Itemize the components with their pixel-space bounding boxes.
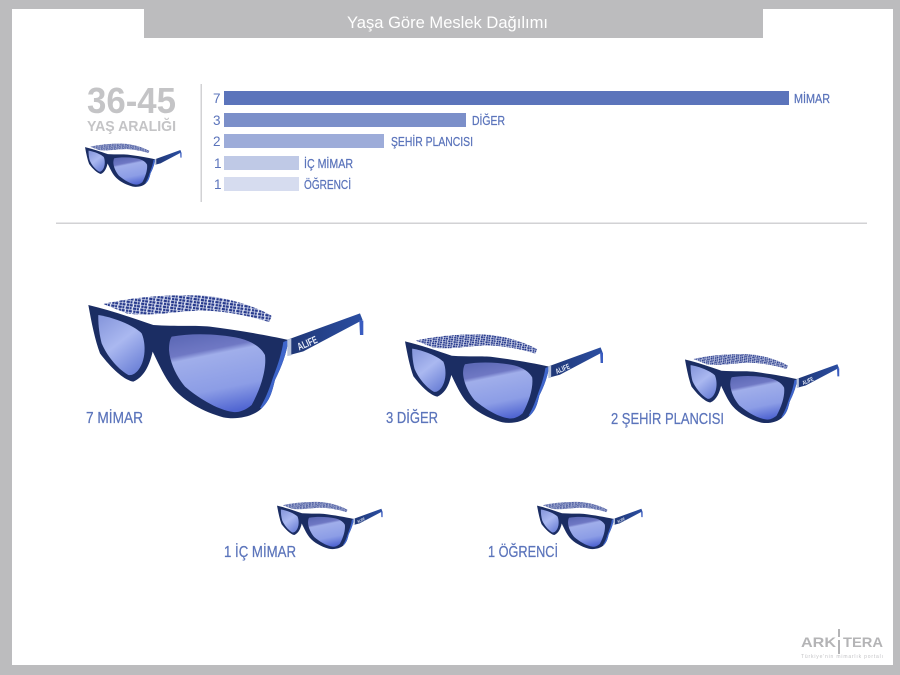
horizontal divider [56,222,867,224]
label: 1 iç mimar: 1 İÇ MİMAR [224,542,296,561]
age range heading: YAŞ ARALIĞI [87,117,176,135]
bar: öğrenci 1: ÖĞRENCİ [304,177,351,192]
icon: large sunglasses: ALIFE [296,334,319,353]
icon: sunglasses: ALIFE [616,516,626,524]
icon: sunglasses: ALIFE [554,362,571,376]
logo: Arkitera: ARK [801,634,836,650]
title bar [144,9,763,38]
bar: öğrenci 1 [214,177,351,192]
pictogram: 1 iç mimar [224,502,383,561]
bar chart: occupations [213,91,830,192]
logo: Arkitera: Türkiye'nin mimarlık portalı [801,654,883,660]
label: 1 öğrenci: 1 ÖĞRENCİ [488,542,558,561]
logo: Arkitera: TERA [843,634,883,650]
icon: large sunglasses [88,295,363,418]
label: 3 diğer: 3 DİĞER [386,408,438,427]
pictogram: 2 şehir plancısı [611,354,839,428]
pictogram: 3 diğer [386,334,603,427]
age range heading: 36-45 [87,80,176,121]
title bar: Yaşa Göre Meslek Dağılımı [347,13,548,32]
bar: mimar 7 [213,91,830,106]
bar: diğer 3 [213,113,505,128]
icon: sunglasses [537,502,643,549]
bar: iç mimar 1: 1 [214,156,222,171]
icon: sunglasses [685,354,839,423]
logo: Arkitera [801,629,883,660]
vertical divider [200,84,202,202]
pictogram: 7 mimar [86,295,363,427]
bar: öğrenci 1: 1 [214,177,222,192]
bar: iç mimar 1 [214,156,353,171]
bar: şehir plancısı 2: 2 [213,134,221,149]
icon: sunglasses [405,334,603,423]
bar: diğer 3: DİĞER [472,113,505,128]
bar: mimar 7: MİMAR [794,92,830,106]
bar: iç mimar 1: İÇ MİMAR [304,157,353,171]
label: 7 mimar: 7 MİMAR [86,408,143,427]
pictogram: 1 öğrenci [488,502,643,561]
icon: small sunglasses [85,144,182,187]
bar: mimar 7: 7 [213,91,221,106]
bar: diğer 3: 3 [213,113,221,128]
icon: sunglasses: ALIFE [356,516,366,524]
label: 2 şehir plancısı: 2 ŞEHİR PLANCISI [611,409,724,428]
icon: sunglasses [277,502,383,549]
bar: şehir plancısı 2: ŞEHİR PLANCISI [391,135,473,149]
bar: şehir plancısı 2 [213,134,473,149]
icon: sunglasses: ALIFE [802,377,815,387]
